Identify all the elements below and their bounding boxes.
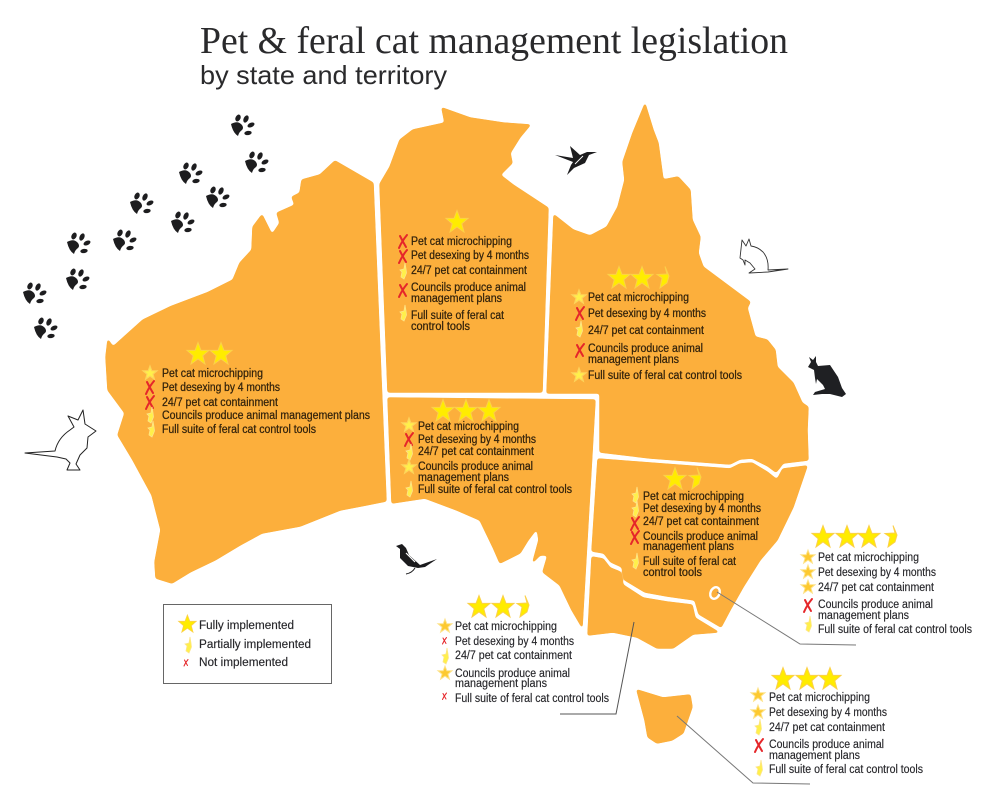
- item: management plans: [418, 472, 509, 484]
- rating stars: [812, 526, 897, 547]
- item: Pet desexing by 4 months: [418, 434, 536, 446]
- item: Councils produce animal: [418, 461, 533, 473]
- item: [755, 739, 884, 762]
- panel: Western Australia: [143, 342, 370, 437]
- item: [400, 305, 505, 333]
- item: [756, 760, 923, 776]
- item: 24/7 pet cat containment: [162, 397, 279, 409]
- item: 24/7 pet cat containment: [818, 582, 935, 594]
- leader line: Victoria: [560, 622, 634, 714]
- item: Pet desexing by 4 months: [162, 382, 280, 394]
- item: Councils produce animal: [769, 739, 884, 751]
- item: Pet cat microchipping: [162, 368, 263, 380]
- panel: New South Wales: [631, 468, 761, 579]
- item: [576, 343, 703, 366]
- panel: Australian Capital Territory: [801, 526, 972, 636]
- rating star: [446, 210, 468, 232]
- panel: South Australia: [402, 400, 572, 497]
- rating stars: [608, 266, 669, 288]
- item: Councils produce animal: [411, 282, 526, 294]
- item: Pet desexing by 4 months: [818, 567, 936, 579]
- title: [200, 20, 788, 90]
- cat paw trail: [23, 114, 269, 339]
- item: Pet cat microchipping: [818, 552, 919, 564]
- item: [406, 444, 535, 460]
- legend entry: partially implemented: Partially implemented: [199, 639, 311, 651]
- icon: paw: [67, 232, 91, 254]
- item: control tools: [643, 567, 702, 579]
- panel: Tasmania: [751, 668, 923, 776]
- item: Councils produce animal: [818, 599, 933, 611]
- item: Full suite of feral cat control tools: [588, 370, 742, 382]
- leader line: ACT: [717, 592, 856, 645]
- item: management plans: [643, 541, 734, 553]
- icon: paw: [23, 282, 47, 304]
- rating stars: [432, 400, 500, 421]
- item: management plans: [455, 678, 547, 690]
- icon: paw: [206, 186, 230, 208]
- rating stars: [187, 342, 232, 364]
- item: Full suite of feral cat control tools: [818, 624, 972, 636]
- item: Councils produce animal: [588, 343, 703, 355]
- item: Councils produce animal: [643, 531, 758, 543]
- state shape: Tasmania: [637, 690, 692, 743]
- item: 24/7 pet cat containment: [643, 516, 760, 528]
- item: management plans: [818, 610, 909, 622]
- item: [438, 666, 570, 690]
- item: [402, 418, 519, 433]
- panel: Queensland: [572, 266, 742, 382]
- legend entry: fully implemented: Fully implemented: [199, 620, 294, 632]
- item: 24/7 pet cat containment: [455, 650, 573, 662]
- item: Pet cat microchipping: [643, 491, 744, 503]
- legend entry: not implemented: Not implemented: [199, 657, 288, 669]
- item: Pet desexing by 4 months: [455, 636, 574, 648]
- state shape: South Australia: [388, 398, 595, 627]
- icon: paw: [66, 268, 90, 290]
- item: [801, 550, 919, 564]
- item: Full suite of feral cat control tools: [455, 693, 609, 705]
- item: [751, 688, 870, 704]
- state shape: Northern Territory: [380, 108, 548, 392]
- item: [402, 460, 533, 484]
- item: Pet cat microchipping: [455, 621, 557, 633]
- legend entry: fully implemented: [179, 615, 294, 632]
- item: [572, 290, 689, 304]
- item: Full suite of feral cat control tools: [162, 424, 316, 436]
- icon: hummingbird: [555, 146, 597, 175]
- heading: subtitle: by state and territory: [200, 60, 447, 90]
- icon: bilby outline (north-east): [740, 239, 788, 273]
- item: management plans: [769, 750, 860, 762]
- state shape: Western Australia: [106, 161, 386, 583]
- heading: main title: Pet & feral cat management legislation: [200, 20, 788, 62]
- icon: kangaroo: [808, 356, 846, 397]
- item: [143, 366, 263, 380]
- state shape: Queensland: [547, 104, 808, 472]
- item: [442, 648, 573, 664]
- item: [438, 619, 557, 633]
- icon: paw: [34, 317, 58, 339]
- item: [399, 282, 526, 305]
- item: Pet cat microchipping: [411, 236, 512, 248]
- item: [805, 616, 972, 636]
- item: [801, 565, 936, 579]
- item: 24/7 pet cat containment: [588, 325, 705, 337]
- rating stars: [772, 668, 841, 689]
- state shape: Victoria: [588, 557, 718, 648]
- item: Full suite of feral cat: [643, 556, 737, 568]
- item: Pet desexing by 4 months: [588, 308, 706, 320]
- item: Pet cat microchipping: [769, 692, 870, 704]
- item: Full suite of feral cat control tools: [769, 764, 923, 776]
- item: control tools: [411, 321, 470, 333]
- legend: [164, 604, 332, 684]
- item: 24/7 pet cat containment: [411, 265, 528, 277]
- item: [576, 321, 705, 337]
- item: [631, 531, 758, 553]
- item: [804, 599, 933, 622]
- item: [406, 481, 572, 497]
- item: [755, 719, 886, 735]
- icon: paw: [245, 151, 269, 173]
- icon: paw: [179, 162, 203, 184]
- item: Pet desexing by 4 months: [643, 503, 761, 515]
- item: Councils produce animal: [455, 668, 570, 680]
- item: Pet desexing by 4 months: [769, 707, 887, 719]
- legend entry: partially implemented: [185, 637, 311, 653]
- map of Australia: [106, 104, 808, 743]
- rating stars: [664, 468, 701, 489]
- icon: paw: [113, 229, 137, 251]
- panel: Victoria: [438, 596, 609, 705]
- leader line: Tasmania: [677, 716, 810, 784]
- icon: paw: [171, 211, 195, 233]
- icon: paw: [231, 114, 255, 136]
- item: Pet cat microchipping: [588, 292, 689, 304]
- item: Councils produce animal management plans: [162, 410, 370, 422]
- item: management plans: [411, 293, 502, 305]
- icon: magpie: [396, 544, 437, 574]
- rating stars: [468, 596, 529, 617]
- item: 24/7 pet cat containment: [418, 446, 535, 458]
- item: Full suite of feral cat: [411, 310, 505, 322]
- panel: Northern Territory: [399, 210, 529, 333]
- item: Pet desexing by 4 months: [411, 250, 529, 262]
- item: [148, 421, 316, 437]
- icon: paw: [130, 192, 154, 214]
- item: management plans: [588, 354, 679, 366]
- icon: bilby outline (west): [25, 410, 96, 470]
- item: [632, 553, 737, 579]
- item: [147, 407, 370, 423]
- state shape: New South Wales: [592, 459, 807, 627]
- item: Pet cat microchipping: [418, 421, 519, 433]
- ACT outline: [708, 586, 722, 600]
- item: [751, 705, 887, 719]
- item: 24/7 pet cat containment: [769, 722, 886, 734]
- item: Full suite of feral cat control tools: [418, 484, 572, 496]
